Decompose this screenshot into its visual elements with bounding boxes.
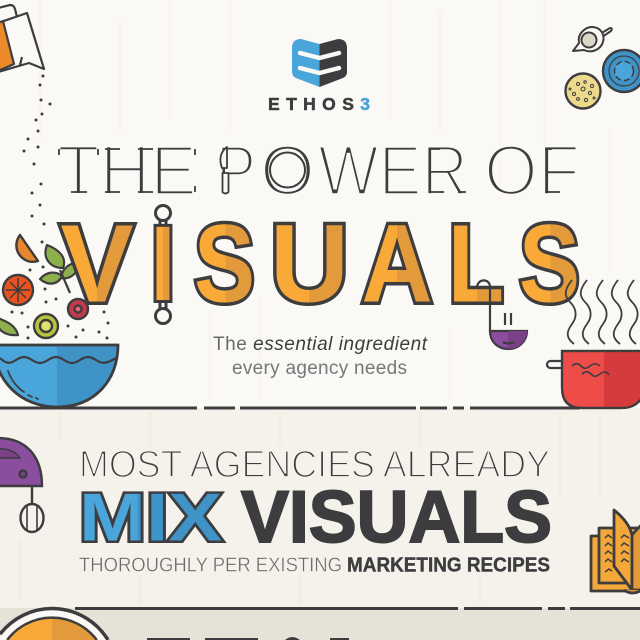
icon: mixing bowl [0, 345, 118, 407]
icon: lime slice [34, 314, 58, 338]
title: THE POWER OF: THE [57, 132, 197, 211]
letter outlines layer: A [362, 202, 432, 326]
subheading: per existing marketing recipes: MARKETING RECIPES [347, 554, 550, 576]
icon: steam [566, 280, 638, 344]
letter fills layer: S [194, 202, 255, 326]
panel: bottom section background [0, 608, 640, 640]
title: VISUALS [60, 202, 580, 326]
icon: cream jug [573, 27, 612, 51]
panel: middle section background [0, 408, 640, 608]
icon: radish slice [68, 299, 88, 319]
letter outlines layer: L [448, 202, 504, 326]
panel: top section background [0, 0, 640, 408]
letter fills layer: U [270, 202, 349, 326]
icon: falling ingredient dots [10, 74, 110, 340]
icon: plate ring of O [270, 152, 305, 188]
icon: small leaf [0, 318, 18, 335]
MIX fill layer: MIX [79, 480, 222, 556]
letter outlines layer [60, 202, 580, 326]
logo wordmark: ETHOS 3 [268, 94, 370, 114]
icon: blue plate [603, 50, 640, 92]
title: THE POWER OF: O [260, 132, 315, 211]
letter outlines layer: U [270, 202, 349, 326]
icon: orange circle badge [0, 609, 108, 640]
icon: cooking pot [547, 351, 640, 408]
heading: next section (cropped) [147, 637, 349, 640]
icon: ladle [477, 280, 527, 349]
letter fills layer: A [362, 202, 432, 326]
icon: cookie [566, 74, 600, 108]
icon: hand mixer [0, 438, 44, 532]
icon: orange slice [16, 235, 38, 262]
icon: basil leaves [40, 245, 79, 293]
title: THE POWER OF: WER [318, 132, 468, 211]
MIX outline layer: MIX [79, 480, 222, 556]
logo: Ethos3 [268, 39, 370, 114]
icon: logo mark [292, 39, 347, 87]
icon: flour bag [0, 5, 44, 72]
VISUALS word: VISUALS [241, 477, 552, 558]
letter fills layer: S [519, 202, 580, 326]
letter fills layer: V [60, 202, 134, 326]
subtitle: every agency needs [232, 358, 407, 379]
letter fills layer [60, 202, 580, 326]
subheading: per existing marketing recipes [79, 554, 550, 576]
subtitle [213, 334, 428, 379]
icon: tomato slice [3, 275, 33, 305]
letter outlines layer: S [194, 202, 255, 326]
heading: most agencies already: MOST AGENCIES ALREADY [79, 444, 550, 486]
title: THE POWER OF [57, 132, 580, 211]
heading: mix visuals [79, 477, 552, 558]
icon: knife stem of P [220, 147, 228, 194]
letter fills layer: L [448, 202, 504, 326]
divider: top section [0, 406, 580, 410]
letter outlines layer: S [519, 202, 580, 326]
icon: rolling pin: I [148, 202, 178, 326]
subtitle: The essential ingredient [213, 334, 428, 355]
subheading: per existing marketing recipes: THOROUGHLY PER EXISTING [79, 554, 342, 576]
letter outlines layer: V [60, 202, 134, 326]
icon: recipe book [591, 510, 640, 593]
title: THE POWER OF: P [216, 132, 256, 211]
divider: middle section [75, 607, 640, 610]
title: THE POWER OF: OF [484, 132, 580, 211]
